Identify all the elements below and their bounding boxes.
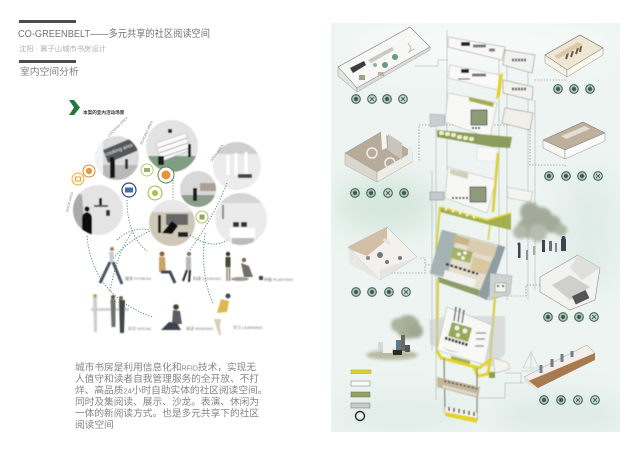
panel: exploded axonometric <box>330 17 630 433</box>
faint sailboat sketch <box>521 350 541 371</box>
curved labels around scene circles: OPEN AREA <box>210 143 225 163</box>
people: planting: 种植 PLANTING <box>264 276 293 282</box>
floor 6 with green court <box>437 307 492 365</box>
people: planting <box>226 252 293 282</box>
tan roof slab <box>437 377 480 398</box>
room: right workshop <box>540 255 600 310</box>
central exploded building stack <box>429 37 535 423</box>
scene: social lounge <box>215 193 267 245</box>
room: top right loft <box>545 35 603 77</box>
person: learning <box>214 294 263 335</box>
floor 3 with courtyard <box>430 93 533 138</box>
yellow frame uprights <box>437 279 495 362</box>
icons: bottom right gallery <box>540 396 599 404</box>
people: cooking <box>159 252 221 283</box>
body paragraph: 城市书房是利用信息化和RFID技术，实现无 <box>75 360 256 374</box>
body paragraph: 一体的新阅读方式。也是多元共享下的社区 <box>75 406 259 420</box>
floor 4 <box>430 167 533 213</box>
guide lines <box>415 30 535 400</box>
scene: fitness <box>149 200 195 246</box>
icon: legend marker <box>356 412 364 420</box>
curved labels around scene circles: BOOK AREA <box>65 191 74 212</box>
scene: planting room <box>180 171 216 207</box>
trees with crowd <box>513 202 567 260</box>
icons: top right room <box>554 85 594 93</box>
room: top left reading gallery <box>338 27 430 92</box>
green terrace with round seats <box>437 130 512 162</box>
curved labels around scene circles: READING AREA <box>139 119 154 145</box>
body paragraph: 烊、高品质24小时自助实体的社区阅读空间。 <box>75 384 267 396</box>
icon: green chevron <box>69 100 80 115</box>
icons: left reading room <box>351 189 408 197</box>
tree with picnic group <box>366 315 423 360</box>
dotted connection lines <box>87 180 227 317</box>
scene: open room <box>213 142 262 190</box>
icons: right exhibition room <box>545 172 602 180</box>
people: social: 社交 SOCIAL <box>128 325 153 331</box>
people figures with captions <box>91 247 293 335</box>
scenes heading with chevron <box>69 100 125 116</box>
room: bottom right gallery <box>524 345 595 390</box>
floor 1 <box>448 37 535 73</box>
grey ghost volume <box>429 316 505 368</box>
body paragraph: 同时及集阅读、展示、沙龙。表演、休闲为 <box>75 395 259 408</box>
person: fitness: 健身 FITNESS <box>125 275 151 281</box>
small activity icons <box>72 164 208 223</box>
ground floor <box>445 407 477 423</box>
curved labels around scene circles: COOKING AREA <box>107 115 129 138</box>
curved labels around scene circles <box>65 115 225 212</box>
people: social <box>91 294 153 333</box>
body paragraph: 阅读空间 <box>75 418 114 431</box>
columns <box>444 358 477 420</box>
body paragraph <box>75 360 267 431</box>
scene: reading shelves <box>146 120 198 172</box>
scene: left bookshelf <box>73 185 123 235</box>
people: cooking: 料理 COOKING <box>193 275 221 281</box>
room: left reading room <box>345 132 412 182</box>
yellow base frame <box>437 351 490 376</box>
body paragraph: 人值守和读者自我管理服务的全开放、不打 <box>75 372 259 385</box>
activity scene circles <box>73 120 267 246</box>
room: left lounge <box>348 227 417 280</box>
scene: cooking area: cooking area <box>105 142 134 158</box>
green band with yellow edge <box>436 153 511 250</box>
title: CO-GREENBELT——多元共享的社区阅读空间 <box>18 27 210 40</box>
person: learning: 学习 LEARNING <box>233 324 263 330</box>
scenes heading with chevron: 本案的室内活动场景 <box>83 109 125 116</box>
subtitle: 沈阳 · 冀子山城市书房设计 <box>19 44 106 53</box>
icons: right workshop <box>544 313 598 321</box>
person: reading <box>161 304 213 331</box>
title block <box>18 20 210 78</box>
floor 5 colored plan <box>430 230 512 300</box>
room: right exhibition room <box>543 122 605 159</box>
background watercolor wash <box>334 36 617 432</box>
legend <box>351 370 371 420</box>
floor 2 <box>448 65 533 100</box>
section heading: 室内空间分析 <box>20 65 79 78</box>
icons: top left room <box>352 95 407 103</box>
person: reading: 阅读 READING <box>186 325 213 331</box>
person: fitness <box>100 247 151 284</box>
scene: cooking area <box>95 135 139 180</box>
icons: left lounge <box>352 288 410 296</box>
